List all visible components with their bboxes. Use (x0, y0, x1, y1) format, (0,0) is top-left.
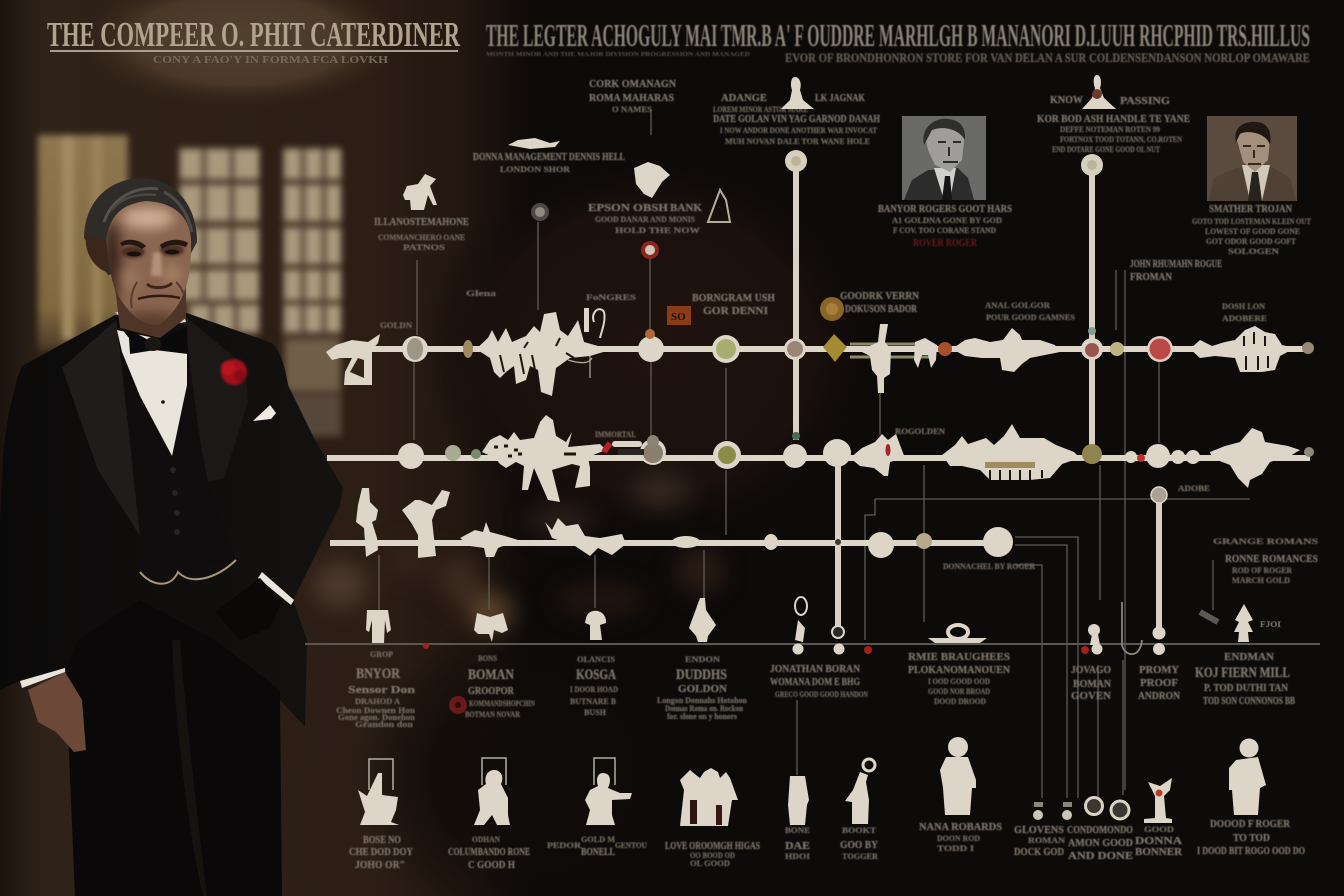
block 6: PLOKANOMANOUEN (908, 664, 1010, 676)
label: top cluster A: O NAMES (612, 105, 653, 114)
block 2 (465, 654, 535, 719)
label: right side cluster: ROD OF ROGER (1232, 566, 1292, 575)
silhouette: animal (326, 334, 380, 385)
bottom text 3: PEDOR (547, 841, 581, 850)
bottom text 10: GOOD (1144, 825, 1174, 834)
legs (65, 560, 282, 896)
caption: portrait 1: ROVER ROGER (913, 237, 978, 249)
red markers on baseline (423, 643, 1089, 654)
figure 9 (1229, 738, 1266, 815)
block 8: PROMY (1139, 664, 1179, 676)
silhouette: figure with red spot (850, 434, 905, 476)
bottom text 1: BOSE NO (363, 834, 401, 846)
caption: portrait 2: GOT ODOR GOOD GOFT (1206, 237, 1297, 246)
icon: chair (403, 174, 437, 210)
label: top cluster B: ADANGE (721, 92, 767, 104)
block 9: KOJ FIERN MILL (1195, 665, 1290, 681)
lapels (62, 320, 140, 536)
background: curtain glow (38, 135, 128, 350)
label: top cluster B: LOREM MINOR ASTOR MAKE (713, 105, 808, 114)
silhouette: long table (942, 424, 1080, 480)
silhouette: figure 3 (460, 522, 518, 557)
small timeline labels: GOR DENNI (703, 305, 768, 317)
bottom text 6: TOGGER (842, 852, 878, 861)
block 1: DRAHOD A (355, 697, 400, 706)
portrait 2 (1207, 116, 1297, 201)
block 8: PROOF (1140, 677, 1178, 689)
label: top cluster A: CORK OMANAGN (589, 78, 676, 90)
node markers (402, 336, 428, 362)
label: chair cluster: COMMANCHERO OANE (378, 233, 465, 242)
label: top cluster B: DATE GOLAN VIN YAG GARNOD DANAH (713, 113, 880, 125)
label: chair cluster: PATNOS (403, 243, 446, 252)
bottom text 8: ROMAN (1028, 836, 1065, 845)
small timeline labels: GOODRK VERRN (840, 290, 919, 302)
node: red pin (641, 241, 659, 259)
bottom text 5 (785, 826, 810, 861)
label: top cluster C: DEFFE NOTEMAN ROTEN 99 (1060, 125, 1160, 134)
label: fish cluster (473, 151, 625, 174)
shirt (117, 330, 187, 456)
portrait 1 (902, 116, 986, 200)
block 6: RMIE BRAUGHEES (908, 651, 1010, 663)
small timeline labels: Glena (466, 289, 496, 298)
block 8: ANDRON (1138, 690, 1180, 702)
small timeline labels: DOSH LON (1222, 302, 1265, 311)
small timeline labels: IMMORTAL (595, 430, 636, 439)
silhouette: gathering (482, 415, 644, 502)
icon: pendant (792, 597, 807, 654)
badge: orange box: SO (671, 311, 686, 323)
small timeline labels (380, 258, 1267, 571)
label: right side cluster: RONNE ROMANCES (1225, 553, 1318, 565)
small timeline labels: ANAL GOLGOR (985, 301, 1050, 310)
node: top circle 1 (785, 150, 807, 172)
label: right side cluster: MARCH GOLD (1232, 576, 1290, 585)
watch chain (140, 560, 236, 584)
top label blocks (374, 78, 1319, 585)
background: blurred crowd (314, 472, 724, 632)
bottom text 3 (547, 835, 647, 858)
caption: portrait 2: SMATHER TROJAN (1209, 203, 1292, 215)
bottom text 2: C GOOD H (468, 859, 515, 871)
bottom text 7 (919, 821, 1002, 853)
block 5: WOMANA DOM E BHG (770, 676, 860, 688)
bottom text 5: BONE (785, 826, 810, 835)
block 3: OLANCIS (577, 655, 616, 664)
small timeline labels: ADOBERE (1222, 314, 1267, 323)
label: chair cluster (374, 216, 469, 252)
label: middle cluster: GOOD DANAR AND MONIS (595, 215, 696, 224)
icon: boat (928, 625, 987, 643)
icon: hook (1122, 602, 1142, 654)
block 4: Donnas Roma on. Rockon (665, 704, 743, 713)
bottom text 7: NANA ROBARDS (919, 821, 1002, 833)
caption: portrait 1: A1 GOLDNA GONE BY GOD (892, 216, 1002, 225)
bottom text 4: LOVE OROOMGH HIGAS (665, 840, 760, 852)
block 9: P. TOD DUTHI TAN (1204, 682, 1288, 694)
label: top cluster C (1037, 94, 1190, 154)
block 2: KOMMANDSHOPCHIN (469, 699, 535, 708)
block 2: GROOPOR (468, 685, 515, 697)
bottom text 4: OO BOOD OD (690, 851, 735, 860)
icon: mushroom figure (585, 611, 606, 640)
node: gray pin (531, 203, 549, 221)
icon: small ornament (708, 190, 730, 222)
right cuff and hand (258, 572, 294, 605)
block 6: DOOD DROOD (934, 697, 986, 706)
silhouette: figure 1 (356, 488, 378, 557)
block 4 (657, 655, 748, 721)
silhouette: seated group (1210, 428, 1300, 488)
figure 6 (845, 759, 875, 824)
block 7: JOVAGO (1071, 664, 1111, 676)
label: top cluster B: I NOW ANDOR DONE ANOTHER WAR INVOCAT (720, 126, 878, 135)
label: right side cluster (1213, 537, 1319, 585)
caption: portrait 2 (1192, 203, 1312, 256)
caption: portrait 2: LOWEST OF GOOD GONE (1205, 227, 1300, 236)
block 4: for. slone on y honors (667, 712, 737, 721)
block 1 (336, 650, 416, 729)
block 4: DUDDHS (676, 667, 727, 683)
badge: orange box (667, 306, 691, 325)
silhouette: figure 2 (402, 490, 450, 558)
bottom text 8 (1014, 824, 1065, 858)
block 3: I DOOR HOAD (570, 685, 618, 694)
block 3: KOSGA (576, 667, 616, 683)
bottom text 11 (1197, 818, 1305, 857)
icon: creature (474, 613, 508, 642)
caption: portrait 2: SOLOGEN (1228, 247, 1279, 256)
label: middle cluster: HOLD THE NOW (615, 226, 700, 235)
label: fish cluster: DONNA MANAGEMENT DENNIS HELL (473, 151, 625, 163)
thin baseline (305, 643, 1320, 645)
bottom row figures (358, 737, 1266, 826)
figure 2 (474, 758, 510, 825)
bottom text 4 (665, 840, 760, 868)
icon: red seal (449, 696, 467, 714)
title: right: MONTH MINOR AND THE MAJOR DIVISION PROGRESSION AND MANAGED (486, 52, 751, 58)
block 2: BONS (478, 654, 497, 663)
bottom text 2 (448, 835, 530, 871)
bottom text 7: DOON ROD (937, 834, 980, 843)
man in tuxedo (0, 178, 343, 896)
label: top cluster C: END DOTARE GONE GOOD OL NUT (1052, 145, 1161, 154)
bottom text 2: COLUMBANDO RONE (448, 846, 530, 858)
bottom text 11: DOOOD F ROGER (1210, 818, 1291, 830)
label: top cluster A: ROMA MAHARAS (589, 92, 674, 104)
label: top cluster C: PASSING (1120, 95, 1170, 107)
block 4: Longon Donnahs Hotohon (657, 696, 748, 705)
block 1: Gone agon. Donehon (338, 713, 416, 722)
icon: tree arrow (1200, 604, 1253, 642)
block 5: JONATHAN BORAN (770, 663, 860, 675)
label: middle cluster: BANK (670, 202, 702, 214)
silhouette: figure 4 (545, 518, 626, 556)
bottom-row label blocks (349, 818, 1305, 871)
bottom text 9 (1067, 824, 1133, 862)
block 3: BUSH (584, 708, 607, 717)
bottom text 7: TODD I (937, 844, 974, 853)
block 5 (770, 663, 868, 699)
small timeline labels: DOKUSON BADOR (845, 303, 918, 315)
small timeline labels: BORNGRAM USH (692, 292, 775, 304)
bottom text 6: BOOKT (842, 826, 877, 835)
block 2: BOMAN (468, 667, 514, 683)
figure 8: trophy (1144, 778, 1172, 823)
timeline track 1 (326, 165, 1314, 448)
bottom text 11: I DOOD BIT ROGO OOD DO (1197, 845, 1305, 857)
bottom text 9: AMON GOOD (1068, 837, 1133, 849)
bottom text 10 (1135, 825, 1183, 858)
bottom text 2: ODHAN (472, 835, 500, 844)
title: left: THE COMPEER O. PHIT CATERDINER (47, 15, 460, 54)
bottom text 1 (349, 834, 413, 871)
jacket (0, 312, 343, 727)
block 1: GROP (370, 650, 393, 659)
bottom text 3: BONELL (581, 846, 615, 858)
bottom text 1: JOHO OR" (355, 859, 405, 871)
icon: column end dots (832, 626, 1166, 655)
label: right side cluster: GRANGE ROMANS (1213, 537, 1319, 546)
small timeline labels: DONNACHEL BY ROGER (943, 562, 1035, 571)
bottom text 9: CONDOMONDO (1067, 824, 1133, 836)
bottom text 4: OL GOOD (690, 859, 730, 868)
small timeline labels: FROMAN (1130, 271, 1172, 283)
left cuff and hand (20, 668, 65, 688)
pocket square (253, 405, 276, 421)
label: middle cluster: EPSON OBSH (588, 202, 668, 214)
bottom text 3: GOLD M (581, 835, 615, 844)
vertical thick lines (796, 165, 1092, 448)
label: top cluster B (713, 92, 880, 146)
label: tree arrow tag: FJOI (1260, 620, 1281, 629)
boutonniere (221, 359, 247, 385)
label: chair cluster: ILLANOSTEMAHONE (374, 216, 469, 228)
thin connector lines (379, 110, 1250, 798)
small timeline labels: ROGOLDEN (895, 427, 945, 436)
block 9: TOD SON CONNONOS BB (1203, 695, 1295, 707)
mid-row label blocks (336, 650, 1295, 729)
title: left: CONY A FAO'Y IN FORMA FCA LOVKH (153, 55, 388, 66)
waistcoat (122, 370, 236, 580)
background: windows (178, 147, 342, 437)
caption: portrait 1: F COV. TOO CORANE STAND (893, 226, 996, 235)
block 7: BOMAN (1073, 678, 1111, 690)
bottom text 8: GLOVENS (1014, 824, 1064, 836)
block 1: Grandon don (355, 720, 414, 729)
block 8 (1138, 664, 1180, 702)
block 7: GOVEN (1071, 690, 1111, 702)
rings and dots (1033, 798, 1129, 820)
block 3: BUTNARE B (570, 697, 617, 706)
figure 7 (940, 737, 976, 815)
block 2: BOTMAN NOVAR (465, 710, 520, 719)
timeline track 2 (327, 415, 1314, 502)
caption: portrait 2: GOTO TOD LOSTEMAN KLEIN OUT (1192, 217, 1312, 226)
block 9 (1195, 651, 1295, 707)
silhouette: group 2 (1190, 326, 1295, 372)
bottom text 10: BONNER (1135, 846, 1183, 858)
bow tie (116, 322, 188, 354)
bottom text 3: GENTOU (615, 841, 647, 850)
label: top cluster B: LK JAGNAK (815, 92, 865, 104)
small timeline labels: POUR GOOD GAMNES (986, 313, 1076, 322)
block 6: GOOD NOR BROAD (928, 687, 990, 696)
figure 4: family group (680, 768, 738, 826)
block 4: ENDON (685, 655, 720, 664)
label: middle cluster (588, 202, 702, 235)
bottom text 5: HDOI (785, 852, 810, 861)
bottom text 8: DOCK GOD (1014, 846, 1064, 858)
icon: bottle figure (689, 598, 716, 642)
silhouette: crowd scene (476, 308, 610, 396)
timeline track 3 (330, 465, 1167, 628)
bottom text 11: TO TOD (1233, 832, 1270, 844)
silhouette: group 1 (952, 328, 1060, 372)
icon: lamp figure (366, 610, 391, 643)
small timeline labels: FoNGRES (586, 293, 637, 302)
icon: figure at top of line 2 (1082, 75, 1116, 109)
small timeline labels: JOHN RHUMAHN ROGUE (1130, 258, 1222, 270)
neck and head (110, 270, 186, 338)
block 9: ENDMAN (1224, 651, 1274, 663)
block 1: Sensor Don (348, 684, 415, 696)
block 7 (1071, 664, 1111, 702)
block 3 (570, 655, 618, 717)
caption: portrait 1 (878, 203, 1012, 249)
block 1: BNYOR (356, 666, 400, 682)
icon: hand (1088, 624, 1102, 654)
icon: figure at top of line 1 (781, 77, 814, 109)
block 1: Cheon Downen Hon (336, 706, 416, 715)
node: top circle 2 (1081, 154, 1103, 176)
silhouette: central column (856, 324, 891, 393)
bottom text 9: AND DONE (1068, 850, 1133, 862)
icon: cow head (634, 162, 670, 198)
label: top cluster C: FORTNOX TOOD TOTANN, CO.ROTEN (1060, 135, 1182, 144)
small timeline labels: ADOBE (1178, 484, 1210, 493)
label: fish cluster: LONDON SHOR (500, 165, 570, 174)
bottom text 5: DAE (785, 840, 810, 852)
label: top cluster B: MUH NOVAN DALE TOR WANE HOLE (725, 137, 870, 146)
block 4: GOLDON (678, 683, 727, 695)
label: top cluster C: KNOW (1050, 94, 1083, 106)
small timeline labels: GOLDN (380, 321, 412, 330)
block 6: I OOD GOOD OOD (928, 677, 990, 686)
figure 3 (585, 758, 632, 825)
bottom text 6: GOO BY (840, 839, 878, 851)
block 6 (908, 651, 1010, 706)
figure 5 (788, 776, 809, 825)
top icons and nodes (403, 75, 1116, 325)
caption: portrait 1: BANYOR ROGERS GOOT HARS (878, 203, 1012, 215)
label: top cluster A (589, 78, 676, 114)
label: top cluster C: KOR BOD ASH HANDLE TE YANE (1037, 113, 1190, 125)
block 5: GRECO GOOD GOOD HANDON (775, 690, 868, 699)
icon: fish (508, 138, 560, 149)
figure 1 (358, 759, 399, 825)
bottom text 1: CHE DOD DOY (349, 846, 413, 858)
title: left (47, 15, 460, 66)
lower icons above baseline (366, 597, 1281, 714)
bottom text 10: DONNA (1135, 835, 1182, 847)
bottom text 6 (840, 826, 878, 861)
